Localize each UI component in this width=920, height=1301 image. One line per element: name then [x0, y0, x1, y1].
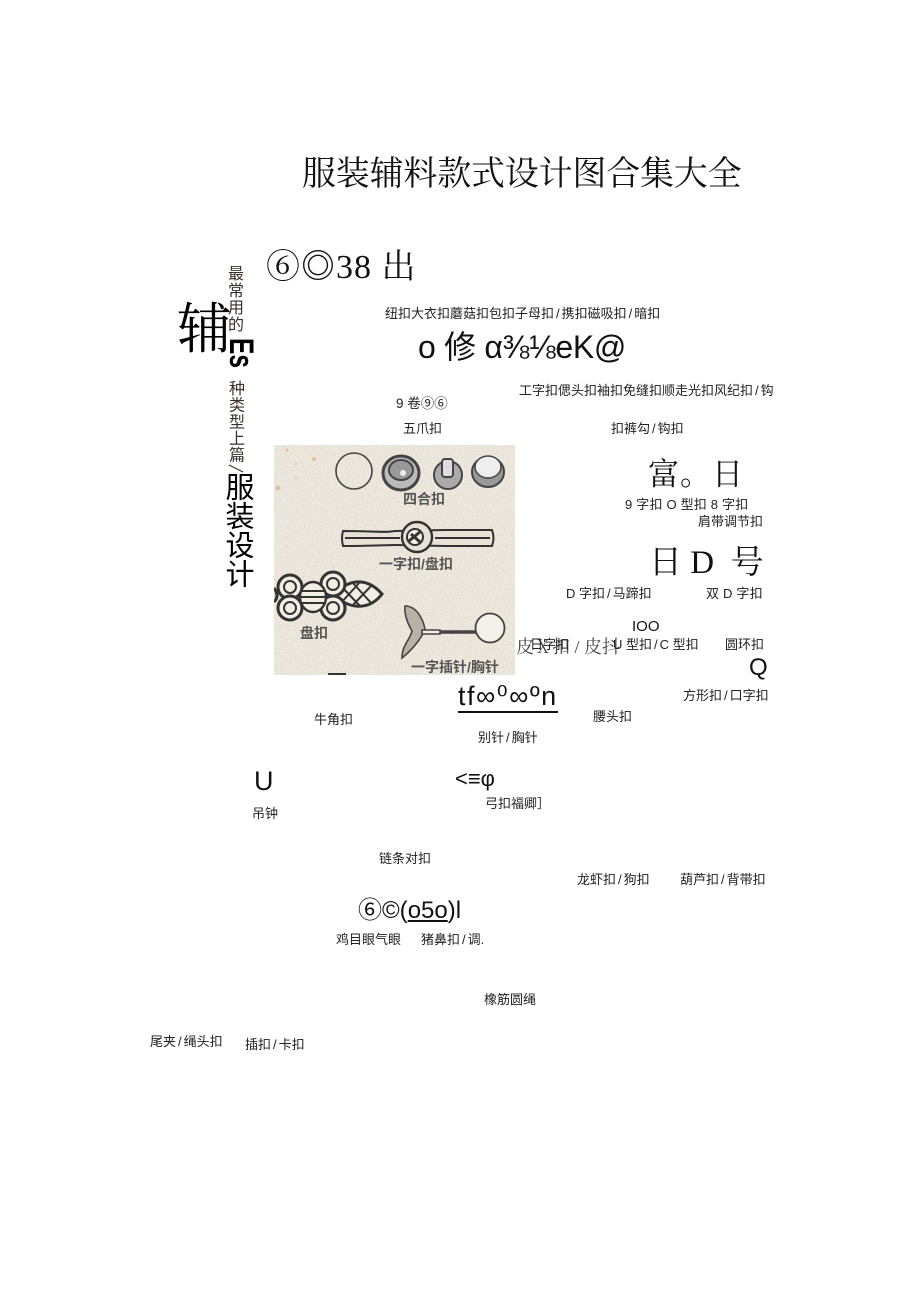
label: ring: 圆环扣: [725, 637, 764, 652]
label: gourd: 葫芦扣/背带扣: [680, 872, 766, 887]
side heading: vertical subtitle: [221, 265, 260, 588]
heading glyphs: buttons: ⑥◎38 出: [266, 249, 416, 286]
label: waist: 腰头扣: [593, 709, 632, 724]
vertical text: Es: Es: [222, 338, 260, 368]
icon: frog button: [342, 522, 494, 552]
heading glyphs: eyelets: ⑥©(o5o)l: [358, 897, 461, 924]
label: tail pin: 一字插针/胸针: [411, 659, 499, 675]
side heading: large character: 辅: [177, 299, 232, 360]
glyph: U: U: [254, 766, 274, 796]
label: eyelet: 鸡目眼气眼: [336, 932, 401, 947]
glyphs: 9 卷: 9 卷⑨⑥: [396, 396, 448, 411]
label: bell: 吊钟: [252, 806, 278, 821]
label: brooch: 别针/胸针: [478, 730, 538, 745]
glyphs: 富: 富。日: [648, 457, 744, 492]
label: square: 方形扣/口字扣: [683, 688, 769, 703]
vertical text: garment design: 服装设计: [221, 472, 253, 588]
title: 服装辅料款式设计图合集大全: [302, 156, 741, 193]
fragment: dark mark: [328, 673, 346, 675]
label: U C: U 型扣/C 型扣: [613, 637, 699, 652]
glyph: Q: Q: [749, 654, 768, 681]
glyphs: <=φ: <≡φ: [455, 766, 495, 791]
label: tail clip: 尾夹/绳头扣: [150, 1034, 223, 1049]
icon: four-part snap: [336, 453, 504, 490]
icon: knotted coil button: [274, 572, 382, 620]
label row: buttons: 纽扣大衣扣蘑菇扣包扣子母扣/携扣磁吸扣/暗扣: [385, 306, 660, 321]
heading glyphs: tf: tf∞⁰∞ºn: [458, 681, 558, 711]
glyphs: IOO: IOO: [632, 618, 660, 635]
label: trouser hook: 扣裤勾/钩扣: [611, 421, 684, 436]
heading glyphs: o 修: o 修 α⅜⅛eK@: [418, 329, 626, 365]
label: cord lock: 猪鼻扣/调.: [421, 932, 484, 947]
label: overlapping belt buckle serif: 皮Ⅹ扣 / 皮抖: [516, 637, 620, 657]
label: 9 O 8: 9 字扣 O 型扣 8 字扣: [625, 497, 748, 512]
label: elastic: 橡筋圆绳: [484, 992, 536, 1007]
label row: I buttons: 工字扣偲头扣袖扣免缝扣顺走光扣风纪扣/钩: [519, 383, 774, 398]
label: horn: 牛角扣: [314, 712, 353, 727]
label: clip: 插扣/卡扣: [245, 1037, 305, 1052]
label: five-claw: 五爪扣: [403, 421, 442, 436]
label: bow: 弓扣福卿］: [485, 796, 550, 811]
illustration panel: button types: [274, 445, 515, 675]
label: 日: 日字扣: [530, 637, 569, 652]
label: coil button: 盘扣: [300, 625, 328, 641]
label: D: D 字扣/马蹄扣: [566, 586, 652, 601]
icon: tail pin: [402, 606, 504, 658]
label: double D: 双 D 字扣: [706, 586, 763, 601]
vertical text: slash: [228, 464, 244, 472]
label: shoulder strap: 肩带调节扣: [698, 514, 763, 529]
label: snap: 四合扣: [403, 491, 445, 507]
glyphs: 日 D 号: 日 D 号: [649, 545, 764, 581]
label: lobster: 龙虾扣/狗扣: [577, 872, 650, 887]
label: chain: 链条对扣: [379, 851, 431, 866]
label: frog: 一字扣/盘扣: [379, 556, 453, 572]
vertical text: types: 种类型上篇: [226, 380, 243, 463]
vertical text: most common: 最常用的: [225, 265, 242, 333]
